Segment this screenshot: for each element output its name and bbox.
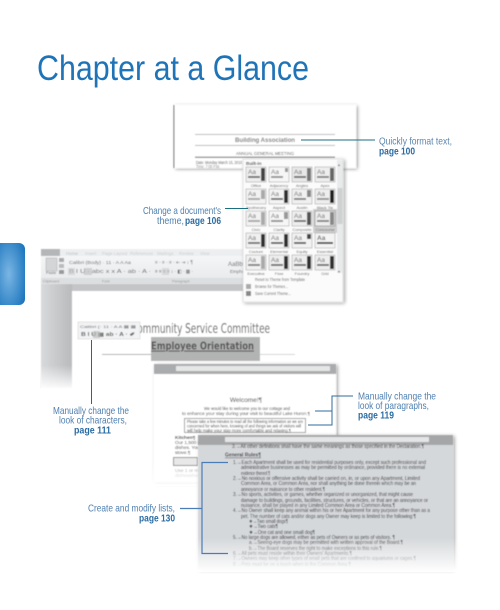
theme gallery dropdown bbox=[243, 159, 343, 302]
screenshot: Word window with ribbon: Calibri (Body) · 11 · A A Aa bbox=[69, 260, 132, 265]
theme thumbnails, row 2: Aa bbox=[317, 191, 325, 198]
screenshot: Word window with ribbon: Page Layout bbox=[102, 251, 128, 256]
theme thumbnails, row 1: Aa bbox=[294, 169, 302, 176]
callout: quickly format text bbox=[301, 136, 452, 158]
screenshot: Word window with ribbon: AaBbCc bbox=[228, 262, 250, 268]
white fade at base of Word window bbox=[41, 365, 73, 390]
screenshot: general rules document: 1.→Each Apartment shall be used for residential purposes only, except such professional and bbox=[233, 460, 426, 466]
theme thumbnails, row 5: Aa bbox=[248, 257, 256, 264]
theme thumbnails, row 3: Aa bbox=[248, 213, 256, 220]
screenshot: general rules document: 3.→No sports, activities, or games, whether organized or unorganized, that might cause bbox=[233, 492, 413, 498]
screenshot: welcome document: Kitchen¶ bbox=[175, 435, 196, 441]
callout: change theme: page 106 bbox=[185, 216, 221, 227]
screenshot: Word window with ribbon: Mailings bbox=[157, 251, 174, 256]
screenshot: top document page: Time: 7:00 P.M. bbox=[196, 164, 220, 169]
screenshot: general rules document: a.→Seeing-eye dogs may be permitted with written approval of the Board.¶ bbox=[249, 540, 403, 546]
theme thumbnails, row 4: Couture bbox=[249, 249, 264, 254]
screenshot: welcome document: Please take a few minutes to read all the following information as we are bbox=[187, 419, 303, 425]
theme thumbnails, row 3: Civic bbox=[252, 227, 260, 232]
screenshot: general rules document: evidence thereof.¶ bbox=[241, 471, 270, 477]
gallery scrollbar: ▴ bbox=[338, 162, 340, 167]
screenshot: Word window with ribbon: ≡ · ≡ · ≡ · ⇤ ⇥ ↕ ¶ bbox=[155, 260, 193, 266]
screenshot: welcome document: to enhance your stay during your visit to beautiful Lake Huron.¶ bbox=[182, 411, 310, 417]
screenshot: Word window with ribbon: Emphasis bbox=[230, 269, 251, 274]
theme thumbnails, row 2: Aa bbox=[271, 191, 279, 198]
theme thumbnails, row 1: Office bbox=[251, 183, 262, 188]
screenshot: Word window with ribbon: Employee Orientation bbox=[151, 340, 254, 352]
screenshot: welcome document: dishwasher bbox=[175, 473, 200, 479]
theme thumbnails, row 3: Concourse bbox=[315, 227, 335, 232]
gallery commands bbox=[246, 277, 305, 296]
screenshot: Word window with ribbon: Insert bbox=[85, 251, 97, 256]
screenshot: top document page: ANNUAL GENERAL MEETING bbox=[236, 151, 294, 156]
screenshot: Word window with ribbon: B I U · abc x x A · ab · A · bbox=[69, 269, 151, 275]
theme thumbnails, row 3: Composite bbox=[292, 227, 312, 232]
callout: manually change paragraphs: Manually change the bbox=[358, 390, 436, 402]
screenshot: welcome document: concerned for when here, knowing of and things we ask of visitors will bbox=[187, 424, 301, 430]
theme thumbnails, row 2: Apothecary bbox=[246, 205, 266, 210]
screenshot: general rules document: 3.→All other definitions shall have the same meanings as those specified in the Declaration.¶ bbox=[232, 444, 424, 450]
screenshot: Word window with ribbon bbox=[41, 249, 342, 391]
screenshot: Word window with ribbon: Community Service Committee bbox=[131, 321, 270, 337]
screenshot: Word window with ribbon: Clipboard bbox=[43, 280, 59, 284]
mini formatting toolbar: B I U ▤ ab · A · ✐ bbox=[81, 332, 135, 338]
callout: create and modify lists: page 130 bbox=[139, 514, 175, 524]
theme thumbnails, row 5 bbox=[246, 255, 335, 276]
screenshot: Word window with ribbon: Font bbox=[102, 280, 111, 284]
screenshot: general rules document: 2.→No noxious or offensive activity shall be carried on, in, or upon any Apartment, Limited bbox=[233, 476, 420, 482]
screenshot: general rules document: b.→The Board reserves the right to make exceptions to this rule.¶ bbox=[249, 546, 382, 552]
screenshot: general rules document: nuisance, shall be played in any Limited Common Area or Common Area.¶ bbox=[241, 503, 395, 509]
theme thumbnails, row 5: Executive bbox=[247, 271, 265, 276]
theme thumbnails, row 5: Grid bbox=[321, 271, 329, 276]
screenshot: Word window with ribbon: Home bbox=[66, 251, 79, 256]
mini formatting toolbar: Calibri (· 11 · A A ▦ ▦ bbox=[80, 324, 136, 329]
theme thumbnails, row 1: Aa bbox=[248, 169, 256, 176]
theme thumbnails, row 5: Aa bbox=[271, 257, 279, 264]
screenshot: general rules document: ❖→One cat and one small dog¶ bbox=[249, 530, 315, 536]
theme thumbnails, row 5: Flow bbox=[275, 271, 283, 276]
theme thumbnails, row 4: Aa bbox=[271, 235, 279, 242]
theme thumbnails, row 2: Black Tie bbox=[317, 205, 334, 210]
screenshot: general rules document: 6.→All pets must reside within their Owners' Apartments.¶ bbox=[233, 551, 352, 557]
theme thumbnails, row 4: Aa bbox=[317, 235, 326, 242]
screenshot: general rules document: 7.→Owners may keep other types of small pets that are confined to aquariums or cages.¶ bbox=[233, 556, 416, 562]
theme thumbnails, row 5: Foundry bbox=[295, 271, 309, 276]
theme thumbnails, row 2: Austin bbox=[296, 205, 308, 210]
theme thumbnails, row 3: Clarity bbox=[273, 227, 285, 232]
theme thumbnails, row 1: Aa bbox=[271, 169, 279, 176]
theme thumbnails, row 1: Apex bbox=[320, 183, 330, 188]
screenshot: general rules document: annoyance or nuisance to other resident.¶ bbox=[241, 487, 325, 493]
theme thumbnails, row 2 bbox=[246, 189, 335, 210]
screenshot: top document page: Building Association bbox=[235, 137, 295, 144]
theme thumbnails, row 4: Aa bbox=[248, 235, 256, 242]
screenshot: Word window with ribbon: ≡ ≡ ≡ ≡ ↕ · ◧ · ▦ · bbox=[155, 269, 193, 275]
screenshot: welcome document: We would like to welcome you to our cottage and bbox=[204, 406, 290, 412]
callout: quickly format text: Quickly format text, bbox=[379, 136, 452, 148]
screenshot: welcome document: Use 1 or mo bbox=[175, 468, 201, 474]
screenshot: general rules document: 8.→Pets must be on a leash when in the Common Area.¶ bbox=[233, 562, 351, 568]
theme thumbnails, row 2: Aa bbox=[248, 191, 256, 198]
screenshot: general rules document: 5.→No large dogs are allowed, either as pets of Owners or as pets of visitors. ¶ bbox=[233, 535, 395, 541]
callout: manually change paragraphs: page 119 bbox=[358, 410, 394, 422]
theme thumbnails, row 1 bbox=[246, 167, 335, 188]
screenshot: Word window with ribbon: Paste bbox=[46, 270, 57, 275]
screenshot: welcome document: Our 1,500 sq bbox=[175, 440, 203, 446]
theme thumbnails, row 4: Aa bbox=[294, 235, 302, 242]
theme thumbnails, row 4: Essential bbox=[317, 249, 333, 254]
screenshot: general rules document: General Rules¶ bbox=[225, 452, 262, 458]
callout: change theme bbox=[143, 205, 248, 227]
callout: create and modify lists bbox=[88, 462, 228, 554]
screenshot: general rules document: ❖→Two small dogs¶ bbox=[249, 519, 288, 525]
theme thumbnails, row 5: Aa bbox=[317, 257, 325, 264]
screenshot: general rules document bbox=[198, 435, 453, 569]
screenshot: Word window with ribbon: References bbox=[130, 251, 154, 256]
callout: manually change characters: Manually change the bbox=[53, 405, 129, 417]
screenshot: Word window with ribbon: Paragraph bbox=[172, 280, 190, 284]
screenshot: welcome document: Welcome!¶ bbox=[230, 397, 263, 404]
theme thumbnails, row 1: Angles bbox=[296, 183, 308, 188]
theme thumbnails, row 4 bbox=[246, 233, 335, 254]
white fade at base of general rules document bbox=[192, 538, 460, 572]
theme thumbnails, row 3: Aa bbox=[271, 213, 279, 220]
screenshot: top document page: Date: Monday March 15, 2010 bbox=[196, 160, 242, 165]
theme thumbnails, row 1: Adjacency bbox=[270, 183, 288, 188]
callout: change theme: Change a document's bbox=[143, 205, 221, 217]
screenshot: welcome document: will help make your stay more comfortable and relaxing.¶ bbox=[187, 428, 291, 434]
title: Chapter at a Glance bbox=[37, 49, 309, 88]
screenshot: general rules document: administrative businesses as may be permitted by ordinance, provided there is no external bbox=[241, 465, 425, 471]
screenshot: general rules document: ❖→Two cats¶ bbox=[249, 524, 278, 530]
theme thumbnails, row 3: Aa bbox=[294, 213, 302, 220]
theme thumbnails, row 4: Equity bbox=[296, 249, 308, 254]
theme thumbnails, row 3: Aa bbox=[317, 213, 325, 220]
callout: create and modify lists: Create and modify lists, bbox=[88, 502, 175, 514]
callout: change theme: theme, bbox=[157, 215, 184, 227]
screenshot: general rules document: damage to buildings, grounds, facilities, structures, or vehicles, or that are an annoyance or bbox=[241, 498, 428, 504]
callout: manually change characters: look of characters, bbox=[59, 414, 127, 426]
gallery scrollbar bbox=[337, 160, 343, 274]
theme thumbnails, row 4: Elemental bbox=[270, 249, 288, 254]
gallery heading: Built-In bbox=[246, 161, 262, 166]
screenshot: welcome document: dishes. You bbox=[175, 445, 200, 451]
screenshot: top document page bbox=[174, 105, 356, 169]
screenshot: general rules document: Common Area, or Common Area, nor shall anything be done therein which may be an bbox=[241, 481, 416, 487]
screenshot: welcome document: stove.¶ bbox=[175, 450, 191, 456]
gallery scrollbar: ▾ bbox=[338, 269, 340, 274]
theme thumbnails, row 2: Aspect bbox=[273, 205, 286, 210]
screenshot: Word window with ribbon: Review bbox=[179, 251, 195, 256]
theme thumbnails, row 3 bbox=[246, 209, 337, 233]
mini formatting toolbar bbox=[78, 322, 140, 339]
gallery commands: Browse for Themes... bbox=[255, 284, 288, 289]
gallery commands: Save Current Theme... bbox=[255, 291, 291, 296]
screenshot: general rules document: pet. The number of cats and/or dogs any Owner may keep is limited to the following:¶ bbox=[241, 514, 416, 520]
screenshot: general rules document: 4.→No Owner shall keep any animal within his or her Apartment for any purpose other than as a bbox=[233, 508, 430, 514]
theme thumbnails, row 5: Aa bbox=[294, 257, 302, 264]
callout: manually change paragraphs bbox=[308, 390, 436, 425]
screenshot: welcome document bbox=[154, 364, 336, 482]
callout: manually change characters: page 111 bbox=[74, 426, 111, 436]
screenshot: Word window with ribbon: View bbox=[200, 251, 210, 256]
theme thumbnails, row 1: Aa bbox=[317, 169, 325, 176]
theme thumbnails, row 2: Aa bbox=[294, 191, 302, 198]
white fade at base of welcome document bbox=[150, 466, 200, 486]
callout: quickly format text: page 100 bbox=[379, 146, 415, 158]
icon: blue chapter tab bbox=[0, 243, 25, 305]
callout: manually change paragraphs: look of paragraphs, bbox=[358, 400, 429, 412]
callout: manually change characters bbox=[53, 340, 129, 436]
gallery commands: Reset to Theme from Template bbox=[255, 277, 305, 282]
